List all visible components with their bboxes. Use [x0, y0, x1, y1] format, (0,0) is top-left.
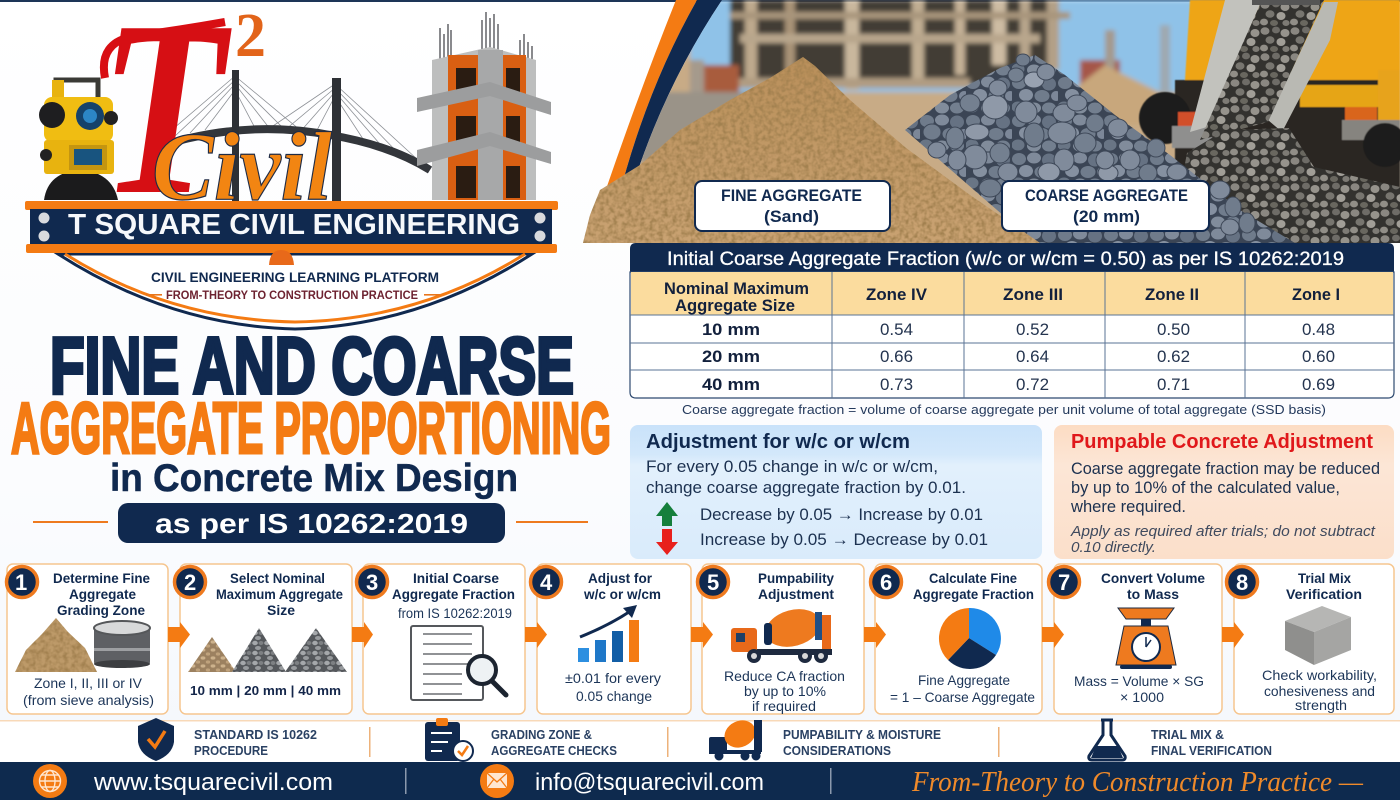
step 5 text: by up to 10%	[744, 683, 826, 699]
pie chart: aggregate fractions	[939, 608, 1001, 669]
table body: 0.66	[880, 347, 913, 366]
feature: standard: STANDARD IS 10262	[194, 727, 317, 742]
table: initial coarse aggregate fraction	[630, 243, 1394, 398]
panel heading: Adjustment for w/c or w/cm	[646, 431, 910, 453]
tagline script: From-Theory to Construction Practice —	[911, 766, 1363, 798]
chute with gravel	[1190, 0, 1338, 140]
icon: envelope	[480, 764, 514, 798]
step number 1: 1	[15, 570, 27, 595]
step 1 card	[6, 564, 168, 714]
hero photo: aggregates at construction site	[583, 0, 1400, 243]
table body: 40 mm	[702, 375, 760, 394]
step 3 heading: Initial Coarse	[413, 570, 499, 586]
step 5 heading: Adjustment	[758, 586, 834, 602]
step 4 text: 0.05 change	[576, 688, 652, 704]
step number 5	[698, 566, 728, 598]
step 1 text	[23, 675, 154, 708]
table body: 0.73	[880, 375, 913, 394]
panel note	[1070, 524, 1376, 556]
step 2 card	[174, 564, 352, 714]
feature: standard: PROCEDURE	[194, 743, 268, 758]
icon: three aggregate piles	[188, 628, 347, 672]
step 1 heading: Determine Fine	[53, 570, 150, 586]
step 8 text: cohesiveness and	[1264, 683, 1375, 699]
step number 2: 2	[184, 570, 196, 595]
table title bar	[630, 243, 1394, 272]
icon: sand pile and sieve	[15, 618, 150, 672]
step 7 text: × 1000	[1120, 689, 1164, 705]
step number 8	[1226, 566, 1258, 598]
feature: trial mix	[1151, 727, 1272, 758]
step 6 heading: Calculate Fine	[929, 570, 1017, 586]
panel body text	[1070, 459, 1380, 516]
table body: Aggregate Size	[675, 296, 795, 315]
footer bar	[0, 762, 1400, 800]
step 5 text: if required	[752, 698, 816, 714]
curved orange band	[604, 0, 697, 200]
step 5 text	[724, 668, 845, 714]
step 7 text: Mass = Volume × SG	[1074, 673, 1204, 689]
arrow 7 to 8	[1222, 622, 1244, 648]
step number 8: 8	[1236, 570, 1248, 595]
step 4 heading	[583, 570, 661, 602]
step 1 text: Zone I, II, III or IV	[34, 675, 143, 691]
blurred construction site backdrop	[640, 0, 1400, 216]
feature: pumpability: CONSIDERATIONS	[783, 743, 891, 758]
logo sub-tagline: FROM-THEORY TO CONSTRUCTION PRACTICE	[166, 290, 418, 302]
step 6 heading: Aggregate Fraction	[913, 586, 1034, 602]
arrow 6 to 7	[1042, 622, 1064, 648]
label: fine aggregate: (Sand)	[764, 207, 819, 226]
panel body text: where required.	[1070, 497, 1186, 516]
icon: flask	[1089, 720, 1125, 760]
table body: 10 mm	[702, 320, 760, 339]
step 4 heading: Adjust for	[588, 570, 653, 586]
icon: shield	[138, 718, 174, 761]
rule: increase: Increase by 0.05 → Decrease by 0.01	[700, 530, 988, 549]
rule: decrease: Decrease by 0.05 → Increase by 0.01	[700, 505, 983, 524]
table body: 0.52	[1016, 320, 1049, 339]
table body	[630, 272, 1394, 398]
feature: standard	[194, 727, 317, 758]
step 6 heading	[913, 570, 1034, 602]
arrow 2 to 3	[352, 622, 373, 648]
panel body text: by up to 10% of the calculated value,	[1071, 478, 1340, 497]
step number 7: 7	[1058, 570, 1070, 595]
logo superscript 2: 2	[235, 2, 266, 70]
step 6 text: = 1 – Coarse Aggregate	[890, 689, 1035, 705]
website: www.tsquarecivil.com	[93, 769, 333, 796]
step 6 text	[890, 672, 1035, 705]
logo word Civil: Civil	[152, 113, 333, 221]
icon: green up arrow	[656, 502, 678, 526]
step 4 heading: w/c or w/cm	[583, 586, 661, 602]
step 2 heading: Maximum Aggregate	[216, 586, 343, 602]
step 6 card	[870, 564, 1042, 714]
icon: red down arrow	[656, 529, 678, 555]
step 5 text: Reduce CA fraction	[724, 668, 845, 684]
panel: pumpable concrete adjustment	[1054, 425, 1394, 559]
step 3 heading: Aggregate Fraction	[392, 586, 515, 602]
feature: grading checks: GRADING ZONE &	[491, 727, 592, 742]
step 7 card	[1048, 564, 1222, 714]
step number 7	[1048, 566, 1080, 598]
step 5 card	[698, 564, 864, 714]
step number 3	[356, 566, 388, 598]
standard pill	[33, 503, 588, 543]
table body: 0.50	[1157, 320, 1190, 339]
label: fine aggregate	[695, 181, 890, 231]
panel heading: Pumpable Concrete Adjustment	[1071, 431, 1373, 453]
curved navy band	[618, 0, 722, 200]
step 2 heading: Select Nominal	[230, 570, 325, 586]
step 5 heading	[758, 570, 834, 602]
table body: Zone III	[1003, 285, 1063, 304]
logo: T Square Civil Engineering	[25, 0, 558, 329]
logo banner: T SQUARE CIVIL ENGINEERING	[68, 209, 520, 241]
label: coarse aggregate	[1002, 181, 1209, 231]
icon: total station instrument	[39, 80, 118, 200]
table body: Zone II	[1145, 285, 1199, 304]
step number 2	[174, 566, 206, 598]
table body: Zone IV	[866, 285, 928, 304]
table body: 20 mm	[702, 347, 760, 366]
coarse aggregate pile	[905, 54, 1295, 243]
step 1 heading	[53, 570, 150, 618]
title block	[11, 321, 611, 543]
panel body text	[646, 457, 966, 497]
icon: globe	[33, 764, 67, 798]
step 2 heading: Size	[267, 602, 295, 618]
step 3 heading: from IS 10262:2019	[398, 605, 512, 621]
top edge line	[0, 0, 1400, 2]
step 6 text: Fine Aggregate	[918, 672, 1010, 688]
step 3 heading	[392, 570, 515, 621]
step 7 heading	[1101, 570, 1205, 602]
panel note: Apply as required after trials; do not subtract	[1070, 524, 1376, 540]
panel body text: Coarse aggregate fraction may be reduced	[1071, 459, 1380, 478]
icon: document with magnifier	[411, 626, 506, 700]
label: coarse aggregate: COARSE AGGREGATE	[1025, 186, 1188, 205]
gravel pile right	[1170, 128, 1400, 243]
step 1 heading: Grading Zone	[57, 602, 145, 618]
step 4 text	[565, 670, 661, 704]
panel note: 0.10 directly.	[1071, 540, 1156, 556]
icon: hard hat	[269, 250, 294, 265]
logo tagline: CIVIL ENGINEERING LEARNING PLATFORM	[151, 269, 439, 285]
feature: grading checks	[491, 727, 617, 758]
table body: 0.62	[1157, 347, 1190, 366]
email: info@tsquarecivil.com	[535, 769, 764, 796]
step 1 heading: Aggregate	[69, 586, 136, 602]
chart icon: rising bars	[578, 605, 639, 662]
arrow 5 to 6	[864, 622, 886, 648]
step 4 card	[530, 564, 691, 714]
table body: Nominal Maximum	[664, 279, 809, 298]
step number 4: 4	[540, 570, 553, 595]
icon: concrete cube	[1285, 606, 1351, 665]
step number 3: 3	[366, 570, 378, 595]
table body: 0.71	[1157, 375, 1190, 394]
arrow 3 to 4	[525, 622, 547, 648]
step number 5: 5	[707, 570, 719, 595]
step number 6	[870, 566, 902, 598]
title line 1: FINE AND COARSE	[50, 321, 574, 410]
arrow 4 to 5	[691, 622, 713, 648]
icon: reinforced concrete building	[417, 12, 551, 200]
step 8 heading: Trial Mix	[1298, 570, 1351, 586]
logo banner	[25, 201, 558, 253]
step 7 text	[1074, 673, 1204, 705]
feature: pumpability	[783, 727, 941, 758]
step 3 card	[356, 564, 525, 714]
table body: 0.60	[1302, 347, 1335, 366]
step 8 heading	[1286, 570, 1362, 602]
table body: 0.64	[1016, 347, 1049, 366]
panel: adjustment for w/c or w/cm	[630, 425, 1042, 559]
step 7 heading: Convert Volume	[1101, 570, 1205, 586]
panel body text: change coarse aggregate fraction by 0.01.	[646, 478, 966, 497]
icon: clipboard	[425, 718, 473, 761]
label: fine aggregate: FINE AGGREGATE	[721, 186, 862, 205]
step number 4	[530, 566, 562, 598]
step 8 text	[1262, 667, 1377, 713]
step 2 heading	[216, 570, 343, 618]
table footnote: Coarse aggregate fraction = volume of coarse aggregate per unit volume of total aggregate (SSD basis)	[682, 402, 1326, 417]
feature strip	[0, 715, 1400, 762]
table title bar: Initial Coarse Aggregate Fraction (w/c or w/cm = 0.50) as per IS 10262:2019	[667, 249, 1344, 270]
table body: 0.54	[880, 320, 913, 339]
step 8 heading: Verification	[1286, 586, 1362, 602]
logo arc emblem	[58, 254, 532, 329]
step 8 card	[1226, 564, 1394, 714]
step 2 sizes: 10 mm | 20 mm | 40 mm	[190, 683, 341, 698]
icon: mixer truck	[709, 715, 762, 760]
table body: 0.72	[1016, 375, 1049, 394]
table body: 0.69	[1302, 375, 1335, 394]
step 8 text: Check workability,	[1262, 667, 1377, 683]
feature: trial mix: TRIAL MIX &	[1151, 727, 1224, 742]
feature: grading checks: AGGREGATE CHECKS	[491, 743, 617, 758]
arrow 1 to 2	[168, 622, 190, 648]
standard pill: as per IS 10262:2019	[155, 508, 468, 539]
icon: concrete mixer truck	[731, 603, 832, 663]
step 8 text: strength	[1295, 697, 1347, 713]
icon: weighing scale	[1116, 608, 1176, 669]
step 1 text: (from sieve analysis)	[23, 692, 154, 708]
title line 2: AGGREGATE PROPORTIONING	[11, 389, 611, 469]
feature: pumpability: PUMPABILITY & MOISTURE	[783, 727, 941, 742]
title line 3: in Concrete Mix Design	[110, 457, 518, 500]
sand pile	[583, 57, 1040, 243]
step 4 text: ±0.01 for every	[565, 670, 661, 686]
step number 1	[6, 566, 38, 598]
table body: Zone I	[1292, 285, 1340, 304]
table body: 0.48	[1302, 320, 1335, 339]
step 5 heading: Pumpability	[758, 570, 834, 586]
step 7 heading: to Mass	[1127, 586, 1179, 602]
step number 6: 6	[880, 570, 892, 595]
mixer truck	[1139, 0, 1400, 200]
icon: cable-stayed bridge	[148, 70, 430, 205]
panel body text: For every 0.05 change in w/c or w/cm,	[646, 457, 938, 476]
label: coarse aggregate: (20 mm)	[1073, 207, 1140, 226]
feature: trial mix: FINAL VERIFICATION	[1151, 743, 1272, 758]
